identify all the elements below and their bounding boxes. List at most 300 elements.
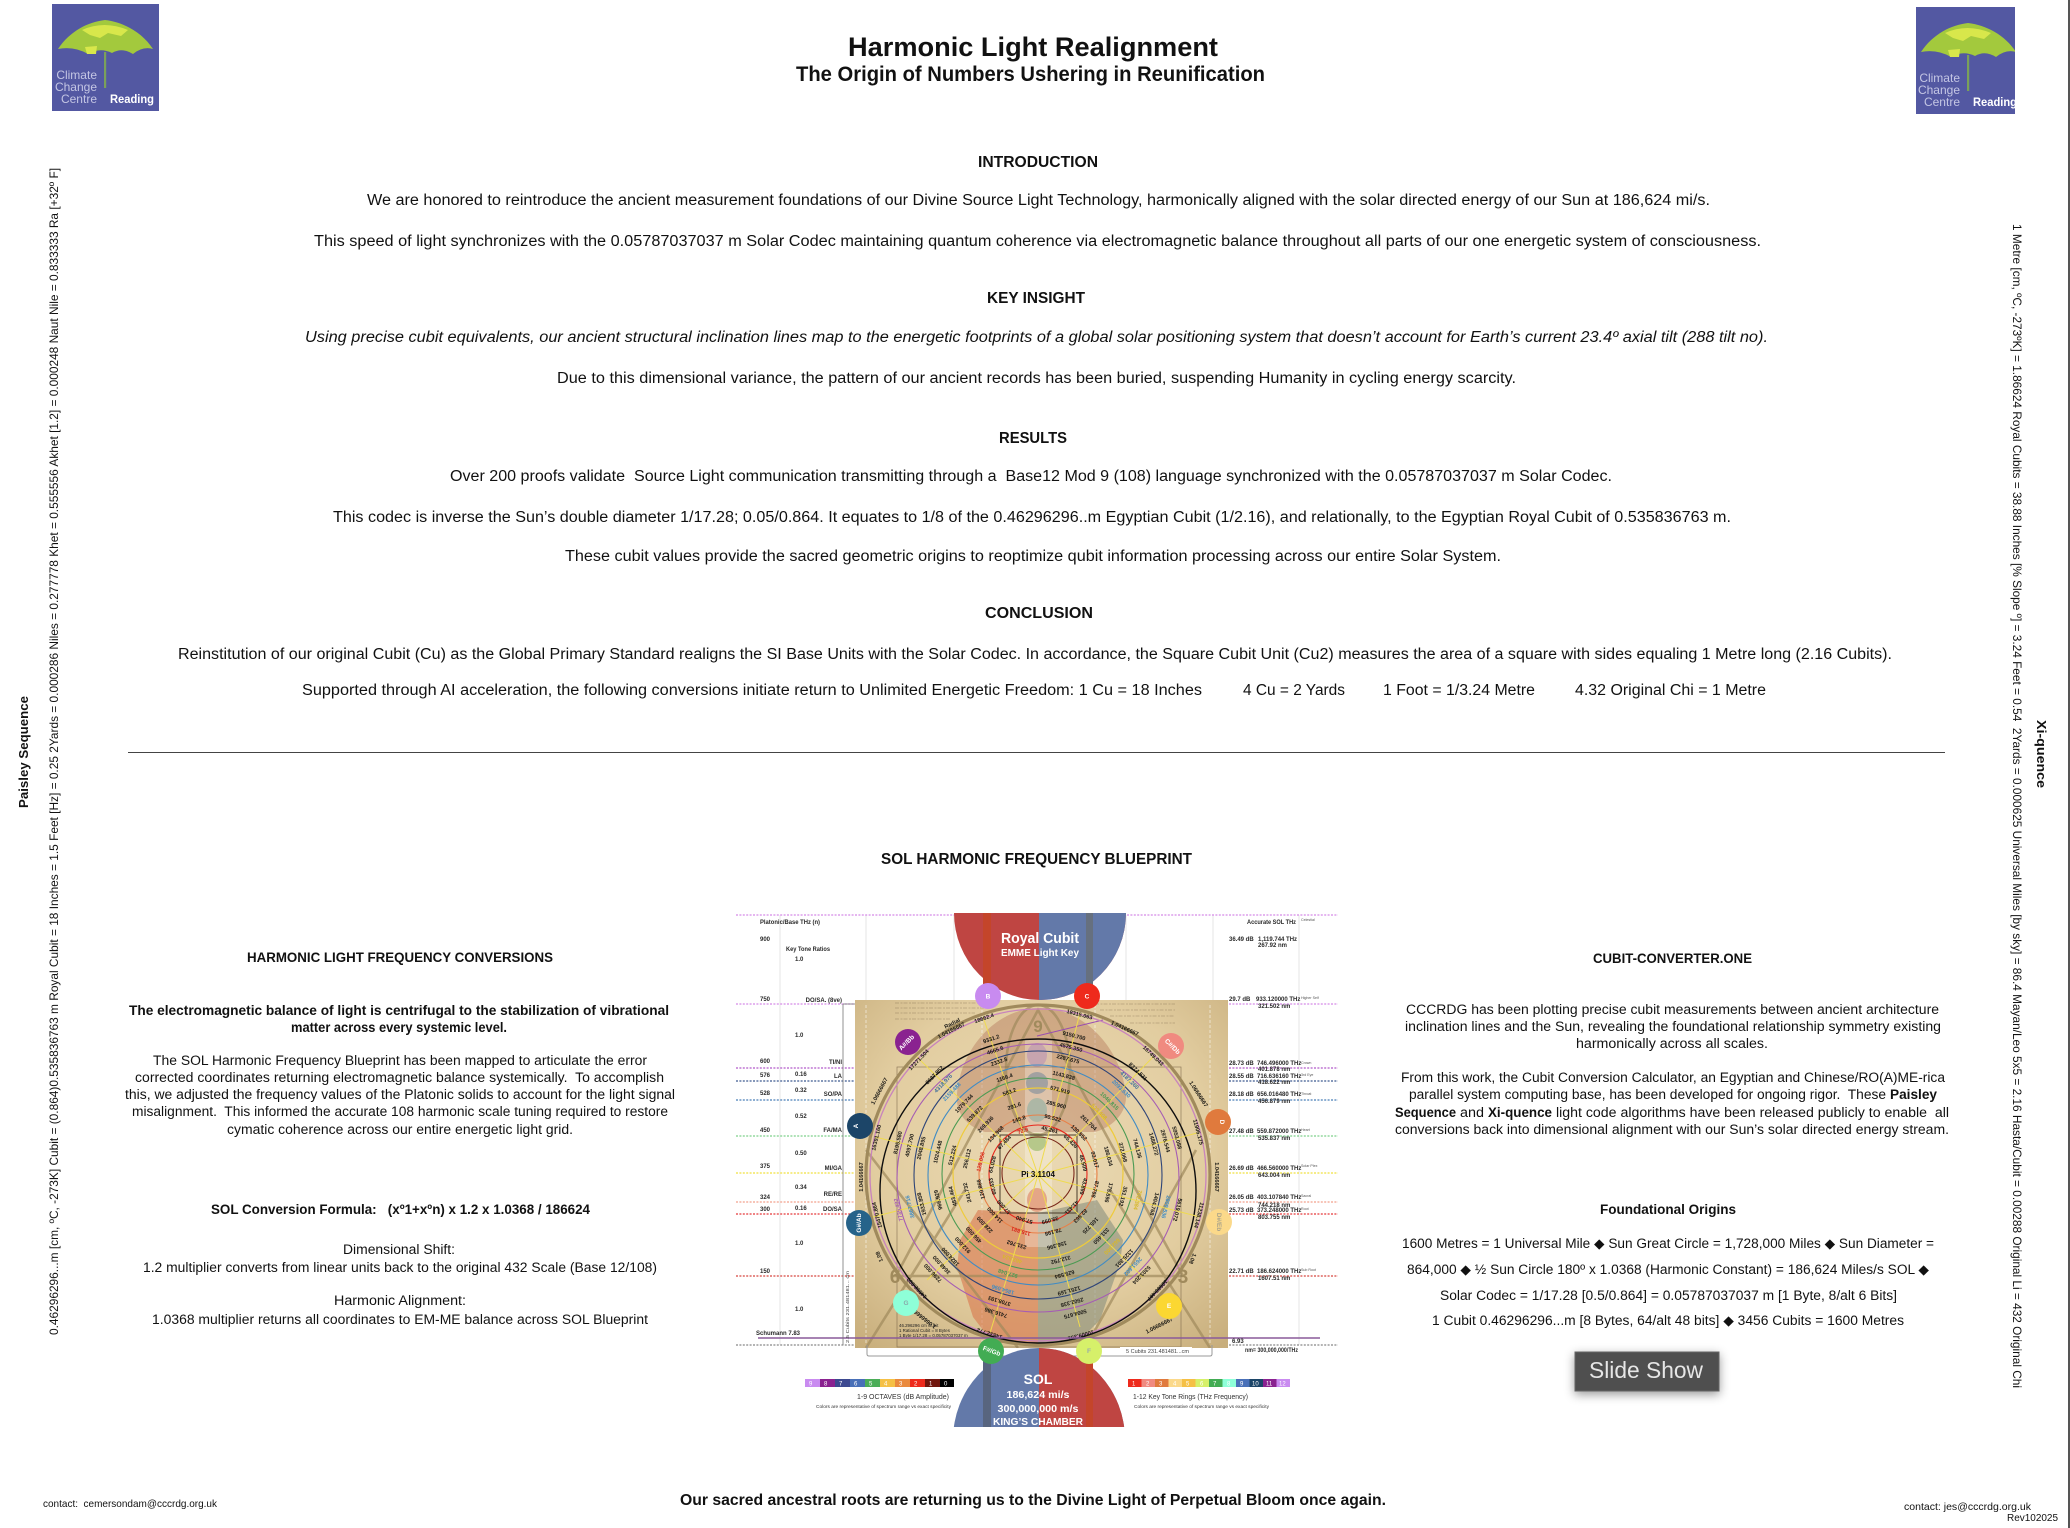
panel: cubit-converter.one: parallel system computing base, has been developed for ongoing rigor. These [1409,1087,1886,1102]
panel: harmonic light frequency conversions: The SOL Harmonic Frequency Blueprint has been mapped to articulate the error [153,1053,648,1068]
legend: 1-9 octaves: 2 [914,1382,918,1388]
left axis labels: base THz and key tone ratios: MI/GA [825,1166,843,1172]
chart: SOL harmonic frequency blueprint: 2.5 Cubits 231.481481... cm [845,1271,850,1343]
key tone nodes: D [1218,1120,1225,1125]
vitruvian parchment background with harmonic rings: 927.048 [998,1267,1019,1278]
ring value labels: 4665.6 [986,1046,1004,1057]
radial ratio labels: 1.04166667 [859,1162,865,1192]
vitruvian parchment background with harmonic rings: 128.056 [976,1151,987,1172]
key tone nodes: C#/Db [1163,1038,1181,1056]
left axis labels: base THz and key tone ratios: 1.0 [795,1307,804,1313]
vitruvian parchment background with harmonic rings: 4575.350 [1059,1042,1083,1054]
right axis labels: accurate SOL THz, dB and chakra names: Crown [1301,1061,1311,1065]
heading: results: RESULTS [999,430,1067,447]
ring value labels: 583.2 [1002,1088,1017,1098]
conclusion block [178,605,1892,699]
logo: Climate Change Centre Reading, right: Climate [1919,71,1960,85]
vitruvian parchment background with harmonic rings: 114.000 [987,1205,1005,1224]
key tone nodes: D#/Eb [1215,1213,1222,1231]
left axis labels: base THz and key tone ratios: 300 [760,1207,771,1213]
key tone nodes: F [1087,1348,1091,1355]
panel: harmonic light frequency conversions: cymatic coherence across our entire energetic light grid. [227,1122,573,1137]
vitruvian parchment background with harmonic rings: 17271.504 [908,1048,931,1072]
key insight block: Using precise cubit equivalents, our ancient structural inclination lines map to the energetic footprints of a global solar positioning system that doesn’t account for Earth’s current 23.4º axial tilt (288 tilt no). [305,329,1768,346]
right axis labels: accurate SOL THz, dB and chakra names: Throat [1301,1092,1311,1096]
left axis labels: base THz and key tone ratios: 0.16 [795,1206,807,1212]
logo: Climate Change Centre Reading, left: Change [55,80,97,94]
vitruvian parchment background with harmonic rings: 87.798 [1089,1180,1099,1198]
conclusion block: 4 Cu = 2 Yards [1243,682,1345,699]
panel: harmonic light frequency conversions: corrected coordinates returning electromagnetic balance systemically. To accomplish [135,1070,664,1085]
right axis labels: accurate SOL THz, dB and chakra names: Accurate SOL THz [1247,920,1296,926]
ring value labels: 145.8 [1012,1115,1027,1125]
results block: These cubit values provide the sacred geometric origins to reoptimize qubit information processing across our entire Solar System. [565,548,1501,565]
subtitle: The Origin of Numbers Ushering in Reunification [796,63,1265,86]
left axis labels: base THz and key tone ratios: Key Tone Ratios [786,947,831,953]
vitruvian parchment background with harmonic rings: 2502.338 [1060,1296,1084,1307]
right axis labels: accurate SOL THz, dB and chakra names: Celestial [1301,918,1315,922]
radial ratio labels: 1.04166667 [1213,1162,1219,1192]
logo: Climate Change Centre Reading, right: Centre [1924,95,1960,109]
vitruvian parchment background with harmonic rings: 463.524 [1001,1252,1023,1264]
chart: SOL harmonic frequency blueprint [736,913,1338,1427]
logo: Climate Change Centre Reading, right [1915,7,2022,114]
vitruvian parchment background with harmonic rings: 662.900 [1102,1236,1121,1255]
vitruvian parchment background with harmonic rings: 186.034 [1102,1146,1113,1168]
panel: harmonic light frequency conversions: this, we adjusted the frequency values of the Platonic solids to account for the light signal [125,1087,675,1102]
left axis labels: base THz and key tone ratios: 1.0 [795,1241,804,1247]
dashed frequency lines [736,915,1338,1345]
right axis labels: accurate SOL THz, dB and chakra names: 643.004 nm [1258,1173,1290,1179]
vitruvian parchment background with harmonic rings: 331.450 [1091,1226,1110,1245]
footer: contact right: contact: jes@cccrdg.org.uk [1904,1501,2032,1513]
conclusion block: Reinstitution of our original Cubit (Cu) as the Global Primary Standard realigns the SI Base Units with the Solar Codec. In accordance, the Square Cubit Unit (Cu2) measures the area of a square with sides equaling 1 Metre long (2.16 Cubits). [178,646,1892,663]
faint column guides [780,915,1299,1345]
legend: 1-12 key tone rings: 6 [1200,1382,1204,1388]
ring value labels: 291.6 [1007,1102,1022,1112]
legend: 1-12 key tone rings: 9 [1240,1382,1244,1388]
conclusion block: 1 Foot = 1/3.24 Metre [1383,682,1535,699]
panel: harmonic light frequency conversions: misalignment. This informed the accurate 108 harmonic scale tuning required to restore [132,1104,668,1119]
vitruvian parchment background with harmonic rings: 5004.675 [1063,1307,1087,1319]
vitruvian parchment background with harmonic rings: 3867.716 [905,1195,917,1219]
vitruvian parchment background with harmonic rings: 571.919 [1049,1085,1070,1096]
right axis labels: accurate SOL THz, dB and chakra names: Sacral [1301,1194,1311,1198]
key tone nodes: F#/Gb [982,1345,1001,1358]
vitruvian parchment background with harmonic rings: 512.224 [948,1144,959,1166]
introduction block: We are honored to reintroduce the ancient measurement foundations of our Divine Source Light Technology, harmonically aligned with the solar directed energy of our Sun at 186,624 mi/s. [367,192,1710,209]
legend: 1-12 key tone rings: 10 [1252,1382,1259,1388]
left axis labels: base THz and key tone ratios: 900 [760,937,771,943]
right axis labels: accurate SOL THz, dB and chakra names: 656.016480 THz [1257,1092,1301,1098]
vitruvian parchment background with harmonic rings: 46.509 [1077,1154,1088,1172]
vitruvian parchment background with harmonic rings: 2976.544 [1159,1129,1171,1154]
radial ratio labels: 1.04166667 [1110,1020,1139,1038]
left axis labels: base THz and key tone ratios: 600 [760,1059,771,1065]
vitruvian parchment background with harmonic rings: 175.596 [1103,1182,1113,1203]
cubit note box: 1 Rational Cubit = 8 Bytes [899,1328,951,1333]
left axis labels: base THz and key tone ratios: 0.52 [795,1114,807,1120]
left axis labels: base THz and key tone ratios: DO/SA [823,1207,843,1213]
right axis labels: accurate SOL THz, dB and chakra names: Higher Self [1301,996,1319,1000]
right axis labels: accurate SOL THz, dB and chakra names: 25.73 dB [1229,1208,1254,1214]
vitruvian parchment background with harmonic rings: 2093.630 [1110,1079,1131,1100]
vitruvian parchment background with harmonic rings: 8637.952 [925,1065,945,1086]
right axis labels: accurate SOL THz, dB and chakra names: 403.107840 THz [1257,1195,1301,1201]
right axis labels: accurate SOL THz, dB and chakra names: 746.496000 THz [1257,1061,1301,1067]
dome: SOL King's Chamber [954,1348,1124,1427]
legend: 1-12 key tone rings: 1 [1132,1382,1136,1388]
panel: cubit-converter.one: 864,000 ◆ ½ Sun Circle 180º x 1.0368 (Harmonic Constant) = 186,624 Miles/s SOL ◆ [1407,1262,1930,1277]
conclusion block: 4.32 Original Chi = 1 Metre [1575,682,1766,699]
left axis labels: base THz and key tone ratios: 0.16 [795,1072,807,1078]
right axis labels: accurate SOL THz, dB and chakra names: 401.878 nm [1258,1067,1290,1073]
vitruvian parchment background with harmonic rings: 256.112 [963,1148,973,1169]
right axis labels: accurate SOL THz, dB and chakra names: 36.49 dB [1229,937,1254,943]
left axis labels: base THz and key tone ratios: 324 [760,1195,771,1201]
conclusion block: Supported through AI acceleration, the following conversions initiate return to Unlimited Energetic Freedom: 1 Cu = 18 Inches [302,682,1202,699]
vitruvian parchment background with harmonic rings: 228.000 [976,1215,994,1234]
panel: cubit-converter.one: conversions back into dimensional alignment with our Sun’s solar directed energy stream. [1395,1122,1949,1137]
ring value labels: 18662.4 [974,1013,996,1025]
panel: harmonic light frequency conversions: matter across every systemic level. [291,1020,507,1035]
vitruvian parchment background with harmonic rings: 7296.000 [923,1262,944,1283]
ring value labels: 1166.4 [996,1073,1015,1084]
key tone nodes [846,983,1232,1364]
left axis labels: base THz and key tone ratios: 0.34 [795,1185,807,1191]
right axis labels: accurate SOL THz, dB and chakra names: 3rd Eye [1301,1073,1313,1077]
right axis labels: accurate SOL THz, dB and chakra names: 1607.51 nm [1258,1276,1290,1282]
dome: Royal Cubit: Royal Cubit [1001,931,1079,947]
logo: Climate Change Centre Reading, left: Reading [110,92,154,106]
dome: SOL King's Chamber: SOL [1024,1371,1053,1387]
vitruvian parchment background with harmonic rings: 539.872 [966,1105,985,1124]
logo: Climate Change Centre Reading, left [52,4,159,111]
vitruvian parchment background with harmonic rings: 9150.700 [1062,1031,1086,1042]
panel: cubit-converter.one: light code algorithms have been released publicly to enable all [1556,1105,1949,1120]
vitruvian parchment background with harmonic rings: 156.396 [1046,1239,1067,1250]
vitruvian parchment background with harmonic rings: 165.725 [1081,1216,1099,1234]
key tone nodes: C [1085,994,1090,1000]
key tone nodes: E [1167,1303,1172,1310]
logo: Climate Change Centre Reading, right: Change [1918,83,1960,97]
vitruvian parchment background with harmonic rings: 45.261 [1040,1125,1059,1136]
vitruvian parchment background with harmonic rings: 64.028 [988,1156,998,1174]
vitruvian parchment background with harmonic rings: 4187.260 [1119,1071,1139,1091]
heading: conversions: HARMONIC LIGHT FREQUENCY CONVERSIONS [247,950,553,965]
heading: cubit converter: CUBIT-CONVERTER.ONE [1593,951,1752,966]
vitruvian parchment background with harmonic rings: 8374.521 [1127,1062,1148,1082]
introduction block [314,154,1761,250]
vitruvian parchment background with harmonic rings: 1046.815 [1098,1091,1119,1112]
vitruvian parchment background with harmonic rings: 10009.351 [1067,1328,1094,1341]
vitruvian parchment background with harmonic rings: 10606.407 [1145,1278,1168,1301]
key insight block [305,290,1768,387]
vitruvian parchment background with harmonic rings: 483.464 [948,1185,959,1207]
left axis labels: base THz and key tone ratios: 1.0 [795,1033,804,1039]
radial ratio labels: 1.08 [875,1250,885,1263]
vitruvian parchment background with harmonic rings: 41.431 [1063,1199,1079,1215]
right axis labels: accurate SOL THz, dB and chakra names: 22.71 dB [1229,1269,1254,1275]
panel: cubit-converter.one: Xi-quence [1488,1105,1552,1120]
radial ratio labels: 1.04166667 [937,1022,966,1040]
vitruvian parchment background with harmonic rings: 456.000 [965,1225,983,1244]
vitruvian parchment background with harmonic rings: 39.099 [1041,1214,1059,1225]
vitruvian parchment background with harmonic rings: 120.866 [976,1178,987,1200]
vitruvian parchment background with harmonic rings: 60.433 [988,1177,998,1195]
legend: 1-9 octaves: Colors are representative of spectrum range vs exact specificity [816,1404,952,1409]
heading: conclusion: CONCLUSION [985,605,1093,622]
vitruvian parchment background with harmonic rings: 65.426 [1062,1134,1078,1150]
panel: cubit-converter.one: 1600 Metres = 1 Universal Mile ◆ Sun Great Circle = 1,728,000 Miles ◆ Sun Diameter = [1402,1236,1934,1251]
vitruvian parchment background with harmonic rings: 2287.675 [1056,1054,1080,1066]
panel: cubit-converter.one: Sequence [1395,1105,1456,1120]
right axis labels: accurate SOL THz, dB and chakra names: Sub Root [1301,1268,1316,1272]
key tone nodes: B [986,994,991,1000]
vitruvian parchment background with harmonic rings: 1325.801 [1113,1247,1134,1268]
legend: 1-12 key tone rings: 8 [1227,1382,1231,1388]
radial ratio labels: 1.06666667 [1187,1080,1208,1108]
right axis labels: accurate SOL THz, dB and chakra names: 186.624000 THz [1257,1269,1301,1275]
right axis labels: accurate SOL THz, dB and chakra names: 28.73 dB [1229,1061,1254,1067]
legend: 1-9 octaves [805,1379,954,1409]
left axis labels: base THz and key tone ratios [756,920,843,1337]
legend: 1-9 octaves: 4 [884,1382,888,1388]
vitruvian parchment background with harmonic rings: 57.000 [996,1198,1012,1215]
radial ratio labels: 1.06666667 [871,1077,890,1106]
panel: cubit-converter.one: Solar Codec = 1/17.28 [0.5/0.864] = 0.05787037037 m [1 Byte, 8/alt 6 Bits] [1440,1288,1897,1303]
vitruvian parchment background with harmonic rings: 1404.768 [1148,1192,1159,1216]
legend: 1-12 key tone rings: 1-12 Key Tone Rings (THz Frequency) [1133,1394,1248,1401]
radial ratio labels: 1.06666667 [911,1306,938,1329]
vitruvian parchment background with harmonic rings: 285.960 [1045,1100,1067,1111]
logo: Climate Change Centre Reading, right: Reading [1973,95,2017,109]
blueprint heading: SOL HARMONIC FREQUENCY BLUEPRINT [881,851,1193,868]
right axis labels: accurate SOL THz, dB and chakra names: 803.755 nm [1258,1215,1290,1221]
vitruvian parchment background with harmonic rings: 18315.063 [1066,1009,1093,1021]
left axis labels: base THz and key tone ratios: LA [834,1074,843,1080]
vitruvian parchment background with harmonic rings: 7416.386 [984,1305,1008,1318]
right axis labels: accurate SOL THz, dB and chakra names: 418.622 nm [1258,1080,1290,1086]
vitruvian parchment background with harmonic rings: 372.068 [1117,1142,1128,1163]
vitruvian parchment background with harmonic rings: 115.881 [1011,1225,1031,1236]
vitruvian parchment background with harmonic rings: 2651.602 [1122,1256,1142,1276]
legend: 1-12 key tone rings [1128,1379,1290,1409]
panel: harmonic light frequency conversions: The electromagnetic balance of light is centrifugal to the stabilization of vibrational [129,1003,669,1018]
vitruvian parchment background with harmonic rings: 1143.838 [1052,1070,1075,1082]
right axis labels: accurate SOL THz, dB and chakra names: 456.879 nm [1258,1099,1290,1105]
legend: 1-9 octaves: 0 [944,1382,948,1388]
panel: cubit-converter.one: harmonically across all scales. [1576,1036,1768,1051]
right axis labels: accurate SOL THz, dB and chakra names [1229,918,1319,1354]
radial ratio labels: Radial [944,1017,962,1031]
right axis labels: accurate SOL THz, dB and chakra names: Heart [1301,1128,1310,1132]
right axis labels: accurate SOL THz, dB and chakra names: 466.560000 THz [1257,1166,1301,1172]
legend: 1-12 key tone rings: 3 [1159,1382,1163,1388]
right axis labels: accurate SOL THz, dB and chakra names: Root [1301,1207,1309,1211]
vitruvian parchment background with harmonic rings: 5953.088 [1170,1126,1182,1150]
spokes [873,1013,1200,1333]
vitruvian parchment background with harmonic rings: 57.940 [1015,1214,1034,1224]
button: slide show: Slide Show [1589,1357,1703,1383]
vitruvian parchment background with harmonic rings: 82.863 [1072,1207,1088,1224]
vitruvian parchment background with harmonic rings: 351.192 [1117,1186,1128,1207]
vitruvian parchment background with harmonic rings: 11906.175 [1191,1119,1204,1146]
right axis labels: accurate SOL THz, dB and chakra names: 716.636160 THz [1257,1074,1301,1080]
panel: cubit-converter.one: 1 Cubit 0.46296296...m [8 Bytes, 64/alt 48 bits] ◆ 3456 Cubits = 1600 Metres [1432,1313,1904,1328]
vitruvian parchment background with harmonic rings [855,1000,1228,1348]
left axis labels: base THz and key tone ratios: 576 [760,1073,771,1079]
vitruvian parchment background with harmonic rings: 5619.072 [1171,1198,1182,1222]
vitruvian parchment background with harmonic rings: 1854.096 [991,1283,1015,1295]
vitruvian parchment background with harmonic rings: 3648.000 [932,1254,952,1275]
dome: SOL King's Chamber: 186,624 mi/s [1006,1389,1070,1401]
right axis labels: accurate SOL THz, dB and chakra names: 373.248000 THz [1257,1208,1301,1214]
dome: SOL King's Chamber: 300,000,000 m/s [998,1403,1079,1415]
legend: 1-12 key tone rings: 12 [1279,1382,1286,1388]
vitruvian parchment background with harmonic rings: 130.852 [1069,1124,1088,1142]
panel: cubit-converter.one [1395,951,1949,1328]
vitruvian parchment background with harmonic rings: 625.584 [1053,1268,1075,1279]
right axis labels: accurate SOL THz, dB and chakra names: 559.872000 THz [1257,1129,1301,1135]
title: Harmonic Light Realignment [848,32,1218,62]
right axis labels: accurate SOL THz, dB and chakra names: 26.05 dB [1229,1195,1254,1201]
vitruvian parchment background with harmonic rings: 3708.193 [988,1294,1012,1307]
vitruvian parchment background with harmonic rings: 3 [1178,1267,1188,1288]
vitruvian parchment background with harmonic rings: 231.762 [1006,1238,1028,1250]
vitruvian parchment background with harmonic rings: 2809.536 [1159,1195,1171,1219]
vitruvian parchment background with harmonic rings: 1079.744 [954,1093,976,1115]
button: slide show [1575,1352,1719,1391]
panel: cubit-converter.one: inclination lines and the Sun, revealing the foundational relationship symmetry existing [1405,1019,1941,1034]
vitruvian parchment background with harmonic rings: 11238.144 [1192,1202,1204,1229]
results block: Over 200 proofs validate Source Light communication transmitting through a Base12 Mod 9 (108) language synchronized with the 0.05787037037 m Solar Codec. [450,468,1612,485]
vitruvian parchment background with harmonic rings: 6 [890,1267,900,1288]
ring value labels: 72.9 [1017,1127,1029,1136]
ring value labels: 9331.2 [982,1034,1001,1045]
right axis labels: accurate SOL THz, dB and chakra names: 535.837 nm [1258,1136,1290,1142]
legend: 1-9 octaves: 5 [869,1382,873,1388]
panel: harmonic light frequency conversions: Harmonic Alignment: [334,1293,466,1308]
right axis labels: accurate SOL THz, dB and chakra names: 744.218 nm [1258,1203,1290,1209]
legend: 1-9 octaves: 1 [929,1382,933,1388]
left axis labels: base THz and key tone ratios: Platonic/Base THz (n) [760,920,820,926]
right axis labels: accurate SOL THz, dB and chakra names: 1,119.744 THz [1258,937,1297,943]
introduction block: This speed of light synchronizes with the 0.05787037037 m Solar Codec maintaining quantum coherence via electromagnetic balance throughout all parts of our one energetic system of consciousness. [314,233,1761,250]
left axis labels: base THz and key tone ratios: 450 [760,1128,771,1134]
heading: key insight: KEY INSIGHT [987,290,1086,307]
vitruvian parchment background with harmonic rings: 14592.000 [906,1276,929,1299]
legend: 1-12 key tone rings: 7 [1213,1382,1217,1388]
vitruvian parchment background with harmonic rings: 241.732 [963,1182,973,1203]
panel: harmonic light frequency conversions: Dimensional Shift: [343,1242,455,1257]
left axis labels: base THz and key tone ratios: 1.0 [795,957,804,963]
cubit note box: 1 Byte 1/17.28 = 0.05787037037 m [899,1333,968,1338]
key insight block: Due to this dimensional variance, the pattern of our ancient records has been buried, suspending Humanity in cycling energy scarcity. [557,370,1516,387]
vitruvian parchment background with harmonic rings: 14832.772 [976,1326,1003,1340]
legend: 1-9 octaves: 9 [809,1382,813,1388]
vitruvian parchment background with harmonic rings: 2048.895 [917,1136,928,1160]
legend: 1-12 key tone rings: 2 [1146,1382,1150,1388]
legend: 1-9 octaves: 8 [824,1382,828,1388]
vitruvian parchment background with harmonic rings: 90.522 [1043,1114,1062,1124]
vitruvian parchment background with harmonic rings: 134.968 [987,1125,1005,1144]
vertical text: Paisley conversions: 0.46296296...m [cm, ºC, -273K] Cubit = (0.864)0.535836763 m Royal Cubit = 18 Inches = 1.5 Feet [Hz] = 0.25 2Yards = 0.000286 Niles = 0.277778 Khet = 0.555556 Akhet [1.2] = 0.000248 Naut Nile = 0.833333 Ra [+32º F] [47,168,61,1335]
cubit note box [899,1323,968,1338]
vertical label: Xi-quence: Xi-quence [2034,720,2049,788]
dome: Royal Cubit: EMME Light Key [1001,947,1079,959]
legend: 1-9 octaves: 6 [854,1382,858,1388]
dome: SOL King's Chamber: KING’S CHAMBER [993,1416,1083,1428]
vitruvian parchment background with harmonic rings: 16749.043 [1141,1045,1164,1068]
dome: Royal Cubit [954,913,1126,1000]
vitruvian parchment background with harmonic rings: 1251.169 [1057,1284,1081,1296]
legend: 1-12 key tone rings: 4 [1173,1382,1177,1388]
panel: cubit-converter.one: Paisley [1890,1087,1937,1102]
left axis labels: base THz and key tone ratios: 150 [760,1269,771,1275]
right axis labels: accurate SOL THz, dB and chakra names: nm= 300,000,000/THz [1245,1348,1298,1354]
vitruvian parchment background with harmonic rings: 312.792 [1050,1254,1071,1265]
vertical text: Xi-quence conversions: 1 Metre [cm, ºC, -273ºK] = 1.86624 Royal Cubits = 38.88 Inches [% Slope º] = 3.24 Feet = 0.54 2Yards = 0.000625 Universal Miles [by sky] = 86.4 Mayan/Leo 5x5 = 2.16 Hasta/Cubit = 0.00288 Original Li = 432 Original Chi [2010,224,2024,1388]
formula: SOL Conversion Formula: (xº1+xºn) x 1.2 x 1.0368 / 186624 [211,1202,590,1217]
chart: SOL harmonic frequency blueprint: 5 Cubits 231.481481...cm [1126,1349,1189,1355]
panel: harmonic light frequency conversions: 1.0368 multiplier returns all coordinates to EM-ME balance across SOL Blueprint [152,1312,648,1327]
vitruvian parchment background with harmonic rings: 1933.858 [917,1192,928,1216]
vitruvian parchment background with harmonic rings: 93.017 [1089,1151,1099,1169]
rings [866,1005,1210,1345]
radial ratio labels: 1.06666667 [1145,1317,1174,1335]
vitruvian parchment background with harmonic rings: 15470.864 [872,1201,884,1228]
left axis labels: base THz and key tone ratios: 0.50 [795,1151,807,1157]
left axis labels: base THz and key tone ratios: SO/PA [824,1092,843,1098]
logo: Climate Change Centre Reading, left: Climate [56,68,97,82]
legend: 1-12 key tone rings: Colors are representative of spectrum range vs exact specificity [1134,1404,1270,1409]
vitruvian parchment background with harmonic rings: 9 [1033,1017,1043,1036]
key tone nodes: G#/Ab [856,1213,863,1233]
legend: 1-9 octaves: 7 [839,1382,843,1388]
results block [333,430,1731,565]
legend: 1-12 key tone rings: 5 [1186,1382,1190,1388]
left axis labels: base THz and key tone ratios: 0.32 [795,1088,807,1094]
left axis labels: base THz and key tone ratios: FA/MA [823,1128,843,1134]
legend: 1-12 key tone rings: 11 [1266,1382,1273,1388]
footer: closing statement: Our sacred ancestral roots are returning us to the Divine Light of Perpetual Bloom once again. [680,1492,1386,1509]
panel: cubit-converter.one: and [1460,1105,1484,1120]
vitruvian parchment background with harmonic rings: 1824.000 [941,1246,961,1267]
footer: contact left: contact: cemersondam@cccrdg.org.uk [43,1498,218,1510]
heading: introduction: INTRODUCTION [978,154,1098,171]
vertical label: Paisley Sequence: Paisley Sequence [16,696,31,808]
right axis labels: accurate SOL THz, dB and chakra names: 267.92 nm [1258,943,1287,949]
vitruvian parchment background with harmonic rings: 912.000 [954,1235,972,1254]
left axis labels: base THz and key tone ratios: RE/RE [824,1192,842,1198]
vitruvian parchment background with harmonic rings: 16391.160 [871,1124,883,1151]
right axis labels: accurate SOL THz, dB and chakra names: Solar Plex [1301,1164,1318,1168]
vitruvian parchment background with harmonic rings: 7735.432 [894,1198,905,1222]
left axis labels: base THz and key tone ratios: 750 [760,997,771,1003]
vitruvian parchment background with harmonic rings: 5303.204 [1130,1264,1151,1285]
left axis labels: base THz and key tone ratios: DO/SA. (8ve) [806,998,842,1004]
radial ratio labels: 1.08 [1187,1252,1197,1265]
panel: harmonic light frequency conversions: 1.2 multiplier converts from linear units back to the original 432 Scale (Base 12/108) [143,1260,657,1275]
right axis labels: accurate SOL THz, dB and chakra names: 933.120000 THz [1256,997,1300,1003]
vitruvian parchment background with harmonic rings: 1488.272 [1147,1132,1159,1156]
vitruvian parchment background with harmonic rings: Pi 3.1104 [1021,1170,1055,1179]
cubit note box: 46.296296 cm Cubit [899,1323,939,1328]
foundational origins: Foundational Origins [1600,1202,1736,1217]
right axis labels: accurate SOL THz, dB and chakra names: 6.93 [1232,1339,1244,1345]
ring value labels [974,1013,1028,1134]
